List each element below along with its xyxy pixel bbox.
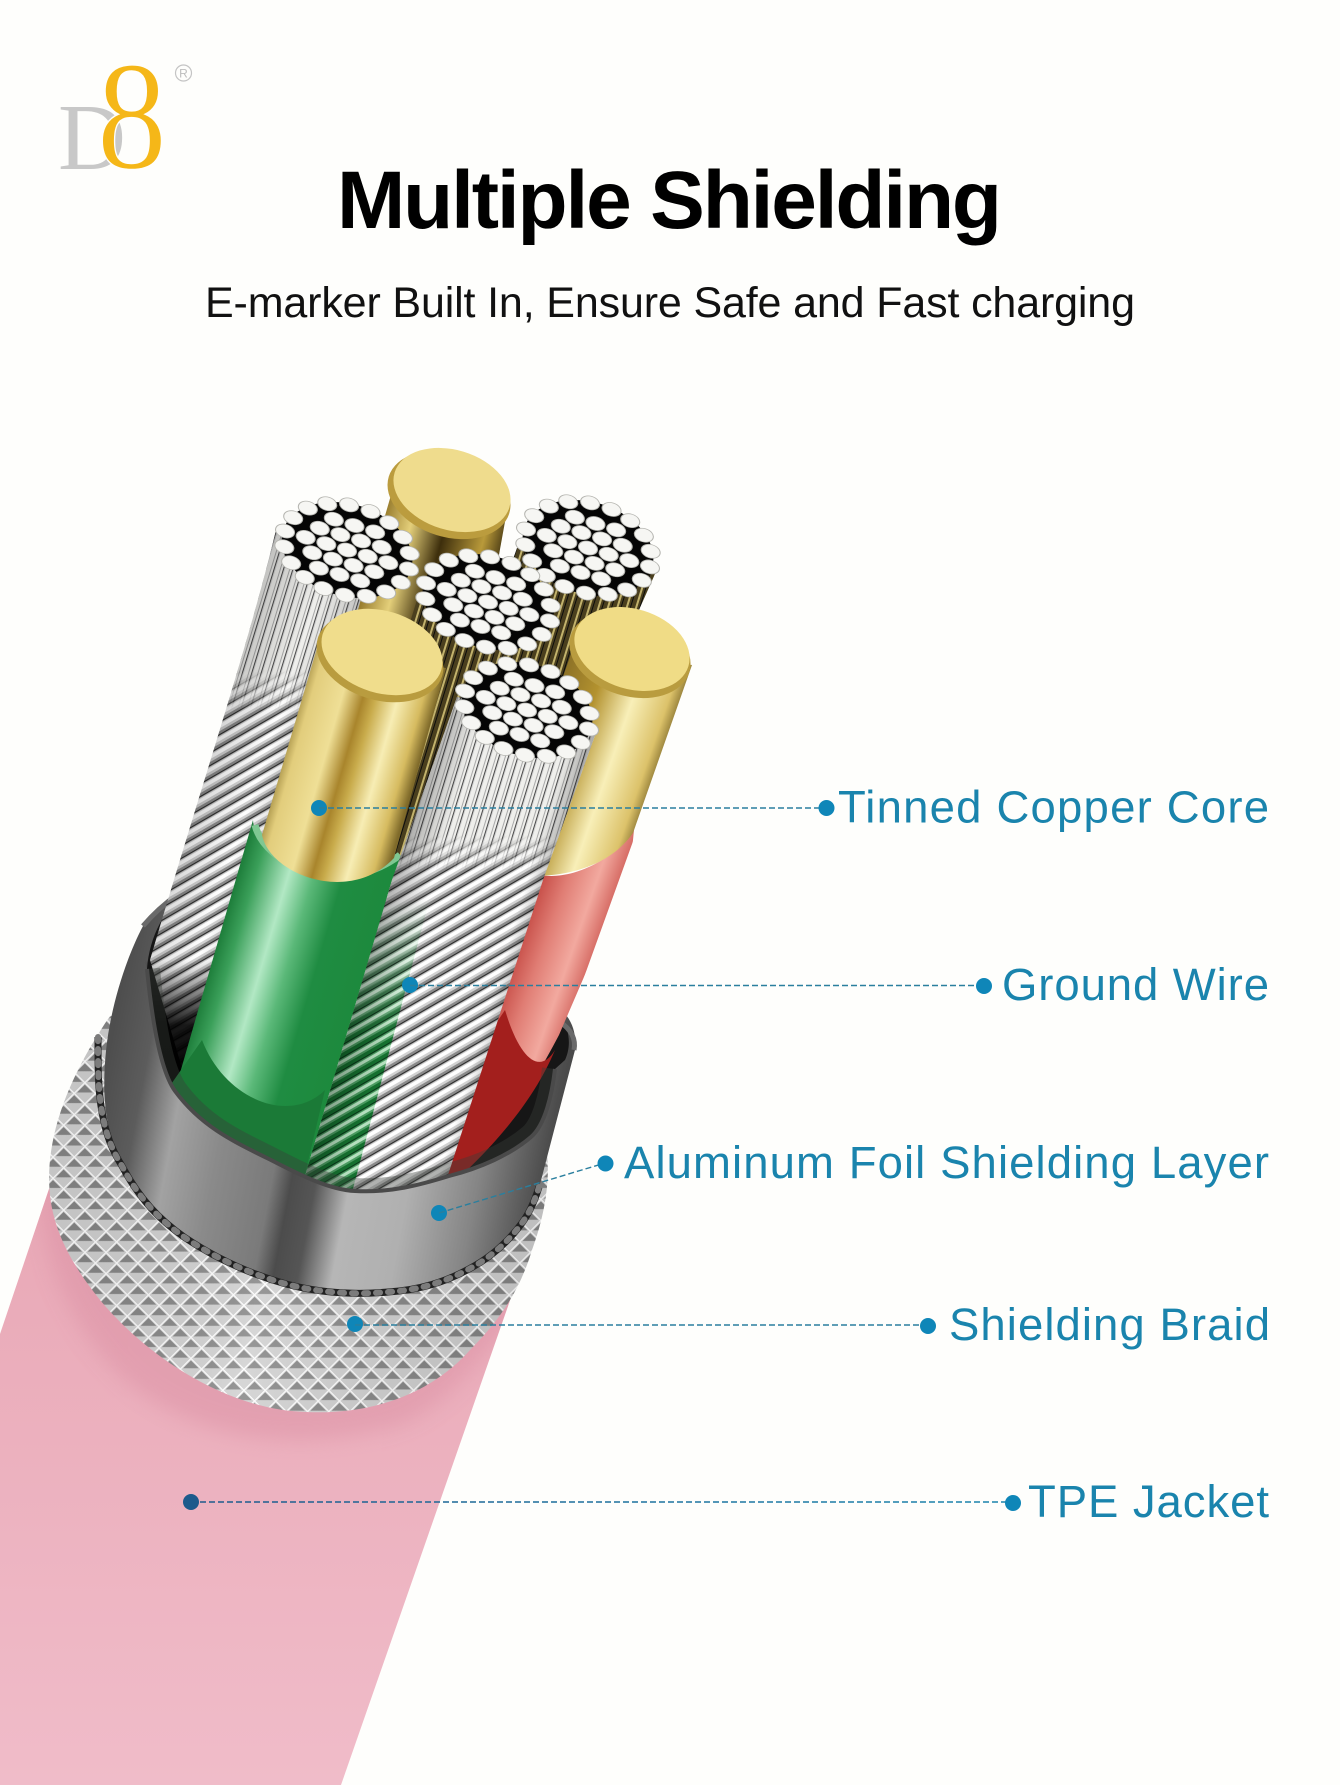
- logo: D8: D: [58, 86, 126, 190]
- title: Multiple Shielding: [337, 155, 1002, 246]
- callout: Ground Wire: Ground Wire: [1002, 959, 1269, 1010]
- logo: D8: 8: [97, 30, 167, 202]
- callout: Aluminum Foil Shielding Layer: Aluminum Foil Shielding Layer: [624, 1137, 1269, 1188]
- callout: TPE Jacket: [183, 1476, 1269, 1527]
- foil inner lip: [147, 969, 555, 1191]
- front stranded ground wire: [306, 656, 600, 1190]
- callout: Tinned Copper Core: Tinned Copper Core: [838, 782, 1269, 832]
- green insulated wire: [172, 820, 400, 1174]
- back-left stranded conductor: [150, 532, 360, 1082]
- logo: D8: [58, 30, 192, 202]
- shielding braid: [49, 1000, 560, 1412]
- centre stranded conductor: [390, 548, 561, 886]
- callout: Shielding Braid: [347, 1299, 1270, 1350]
- TPE jacket: [0, 1188, 510, 1785]
- callout: Ground Wire: [402, 959, 1269, 1010]
- conductors: [130, 434, 702, 1200]
- back-right stranded conductor: [514, 494, 661, 676]
- cable illustration: [0, 434, 702, 1785]
- callout: Shielding Braid: Shielding Braid: [949, 1299, 1270, 1350]
- red insulated wire: [448, 830, 634, 1174]
- callout: Aluminum Foil Shielding Layer: [431, 1137, 1269, 1221]
- logo: D8: R: [179, 66, 188, 80]
- callout: TPE Jacket: TPE Jacket: [1028, 1476, 1269, 1527]
- gold core: front right: [544, 607, 692, 876]
- back gold core: [358, 448, 511, 620]
- aluminum foil shielding layer: [98, 840, 575, 1293]
- subtitle: E-marker Built In, Ensure Safe and Fast charging: [205, 279, 1135, 327]
- callout: Tinned Copper Core: [311, 782, 1269, 832]
- foil front lip: [147, 969, 555, 1191]
- gold core: front left: [262, 595, 455, 882]
- back-left strand face: [274, 496, 420, 604]
